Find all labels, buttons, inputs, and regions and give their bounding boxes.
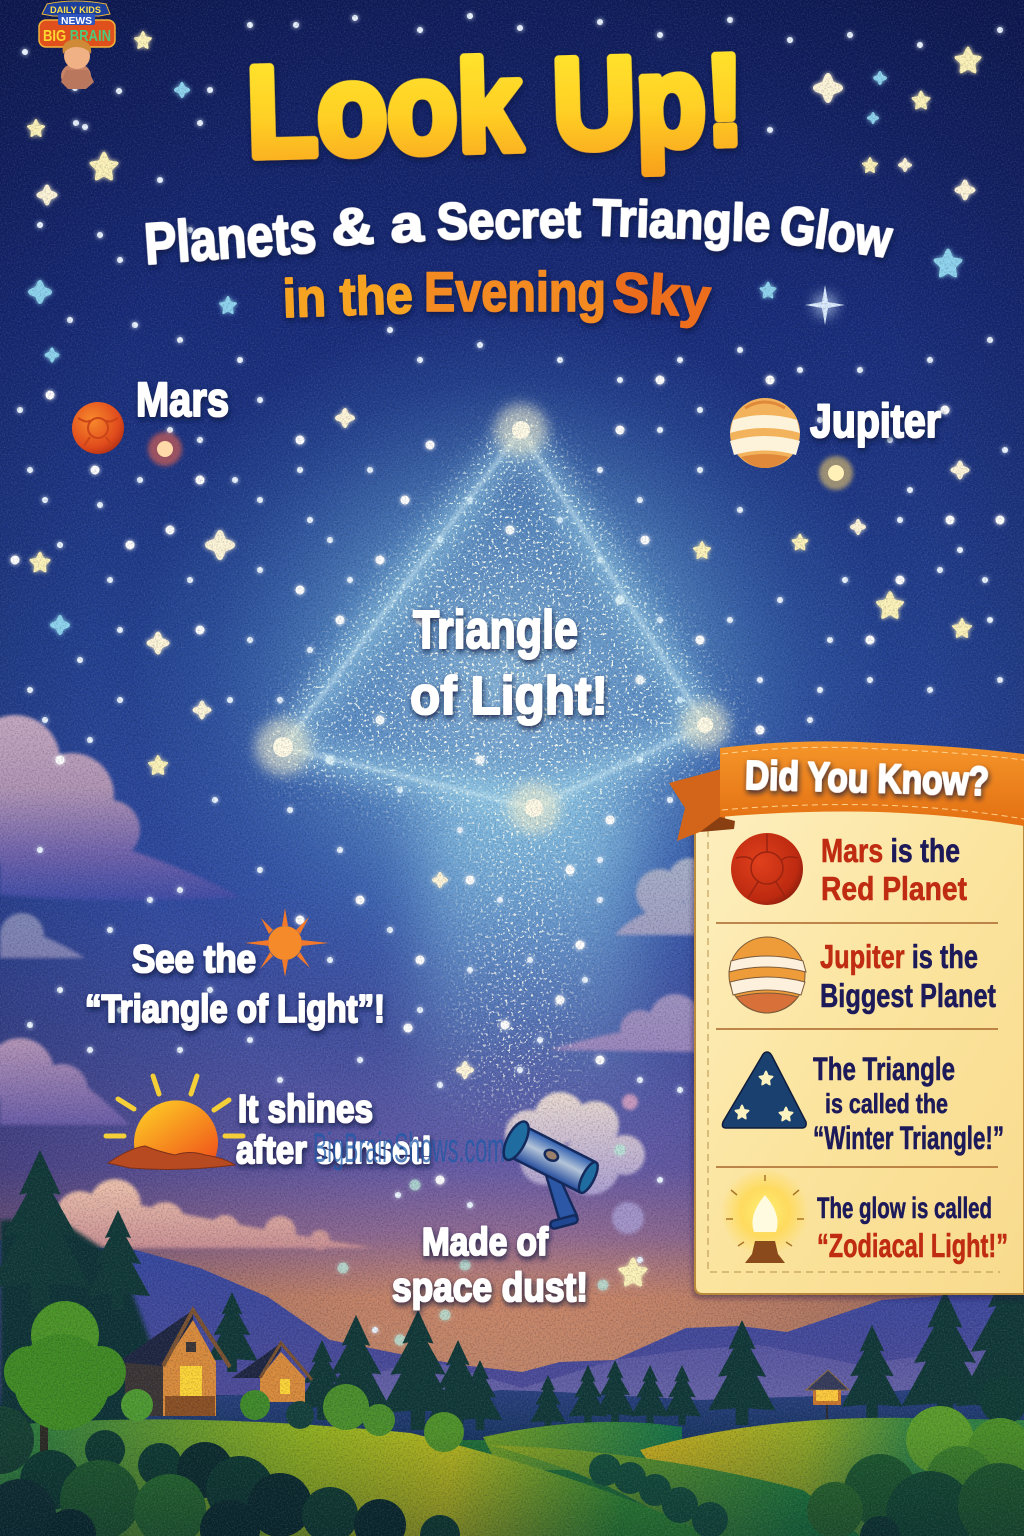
subtitle: Planets & a Secret Triangle Glow: & a <box>330 195 426 257</box>
label: Triangle of Light!: Triangle <box>413 600 578 660</box>
ribbon fold <box>700 817 735 832</box>
hill: far middle <box>483 1422 682 1470</box>
Jupiter label: Jupiter <box>810 394 941 447</box>
logo text: big brain: BIG BRAIN <box>43 28 111 45</box>
triangle of light <box>231 391 772 1140</box>
meadow base <box>0 1440 1024 1536</box>
label: See the Triangle of Light <box>85 938 385 1031</box>
triangle text <box>813 1051 1004 1156</box>
Jupiter text <box>820 938 996 1014</box>
panel stitching <box>708 830 1000 1272</box>
logo: Daily Kids News Big Brain <box>39 1 115 89</box>
row: Mars fact <box>731 832 967 907</box>
planet: Mars <box>72 374 229 466</box>
cloud: right of triangle <box>550 858 712 1052</box>
icon: small orange sun <box>245 908 329 977</box>
subtitle: Planets & a Secret Triangle Glow: Glow <box>776 194 896 270</box>
Jupiter globe <box>730 398 800 468</box>
label: It shines after sunset!: It shines <box>238 1088 373 1131</box>
logo text: daily kids: DAILY KIDS <box>50 5 101 15</box>
title: Look Up!: Look Up! <box>245 29 746 184</box>
label: Made of space dust!: Made of <box>422 1221 549 1264</box>
puffy stars: white and cream <box>36 73 976 1079</box>
house: small cottage <box>232 1343 312 1402</box>
logo news plate <box>58 14 95 25</box>
subtitle: Planets & a Secret Triangle Glow: Planets <box>142 200 318 277</box>
mountains: far ridge <box>0 1240 1024 1440</box>
subtitle: Planets & a Secret Triangle Glow: Secret <box>436 191 581 251</box>
label: Triangle of Light!: of Light! <box>410 666 608 726</box>
label: Made of space dust!: space dust! <box>392 1264 588 1310</box>
coloured stars: blue and mint <box>28 71 963 635</box>
ribbon tail <box>669 768 725 841</box>
forest band <box>0 1380 1024 1450</box>
divider lines <box>716 923 998 1167</box>
lamp text <box>817 1192 1008 1264</box>
label: See the Triangle of Light: “Triangle of Light”! <box>85 988 385 1031</box>
dark left woodland <box>0 1220 150 1430</box>
trees: round left tree <box>4 1301 464 1460</box>
subtitle: Planets & a Secret Triangle Glow: Triangle <box>592 189 771 253</box>
label: It shines after sunset!: after sunset! <box>236 1129 432 1172</box>
logo banner <box>42 1 110 16</box>
triangle text: The Triangle <box>813 1051 955 1087</box>
cloud: upper left <box>0 715 240 901</box>
house: right cabin <box>806 1370 849 1419</box>
milky glow around the triangle <box>130 300 890 1150</box>
cloud: lower left <box>0 1038 130 1125</box>
logo text: news: NEWS <box>61 16 92 27</box>
Mars text: Mars is the <box>821 832 960 869</box>
bottom shading <box>0 1430 1024 1536</box>
hill: left <box>0 1419 712 1536</box>
planet: Jupiter <box>730 394 941 490</box>
Jupiter icon <box>729 937 806 1013</box>
row: Jupiter fact <box>729 937 996 1014</box>
label: Triangle of Light! <box>410 600 608 726</box>
Mars text: Red Planet <box>821 870 967 907</box>
watermark: BigBrainShows.com: BigBrainShows.com <box>313 1124 505 1171</box>
house: large cottage <box>118 1310 230 1416</box>
label: Made of space dust! <box>392 1221 588 1310</box>
icon: setting sun <box>106 1076 243 1169</box>
landscape <box>0 1150 1024 1536</box>
mascot <box>61 39 94 89</box>
subtitle: in the Evening Sky: Sky <box>611 260 713 329</box>
label: See the Triangle of Light: See the <box>132 938 256 981</box>
row: Zodiacal Light fact <box>721 1168 1008 1264</box>
panel: Did You Know? <box>669 741 1024 1294</box>
triangle outline soft glow <box>283 430 705 808</box>
clouds <box>0 715 712 1250</box>
ribbon stitching <box>722 747 1024 819</box>
subtitle: Planets & a Secret Triangle Glow <box>142 189 896 277</box>
sparkle star <box>805 285 845 325</box>
subtitle: in the Evening Sky: in the <box>282 265 414 329</box>
subtitle: in the Evening Sky: Evening <box>424 260 606 323</box>
triangle icon <box>722 1052 806 1128</box>
lamp icon <box>721 1168 809 1263</box>
larger round stars <box>15 380 1000 1180</box>
hill: middle <box>490 1445 860 1536</box>
Mars label: Mars <box>136 374 229 427</box>
bushes: lower left <box>0 1406 460 1536</box>
triangle dust <box>231 391 772 1140</box>
pine trees <box>0 1150 1024 1430</box>
dim pastel dust dots <box>343 1150 620 1340</box>
panel parchment <box>695 800 1024 1294</box>
cloud: behind telescope <box>505 1092 645 1234</box>
hill: right <box>640 1418 1024 1536</box>
Mars text <box>821 832 967 907</box>
bushes: lower right <box>807 1376 1024 1536</box>
icon: telescope <box>499 1118 603 1229</box>
label: It shines after sunset! <box>236 1088 432 1172</box>
Mars star <box>148 432 182 466</box>
triangle outline <box>283 430 705 808</box>
ribbon banner <box>720 741 1024 826</box>
subtitle: in the Evening Sky <box>282 260 713 329</box>
row: Winter Triangle fact <box>722 1051 1004 1156</box>
Jupiter star <box>819 456 853 490</box>
five-point stars: cream <box>27 31 982 1286</box>
Jupiter text: Jupiter is the <box>820 938 978 975</box>
bushes: centre hedge <box>589 1454 728 1536</box>
Mars icon <box>731 833 803 905</box>
triangle vertex stars <box>255 404 729 834</box>
cloud: sunset streak <box>56 1179 375 1250</box>
Mars globe <box>72 402 124 454</box>
triangle text: is called the <box>825 1088 948 1119</box>
cloud: left thin <box>0 913 85 958</box>
logo plate <box>39 20 115 47</box>
mountains: near ridge <box>330 1340 1024 1440</box>
